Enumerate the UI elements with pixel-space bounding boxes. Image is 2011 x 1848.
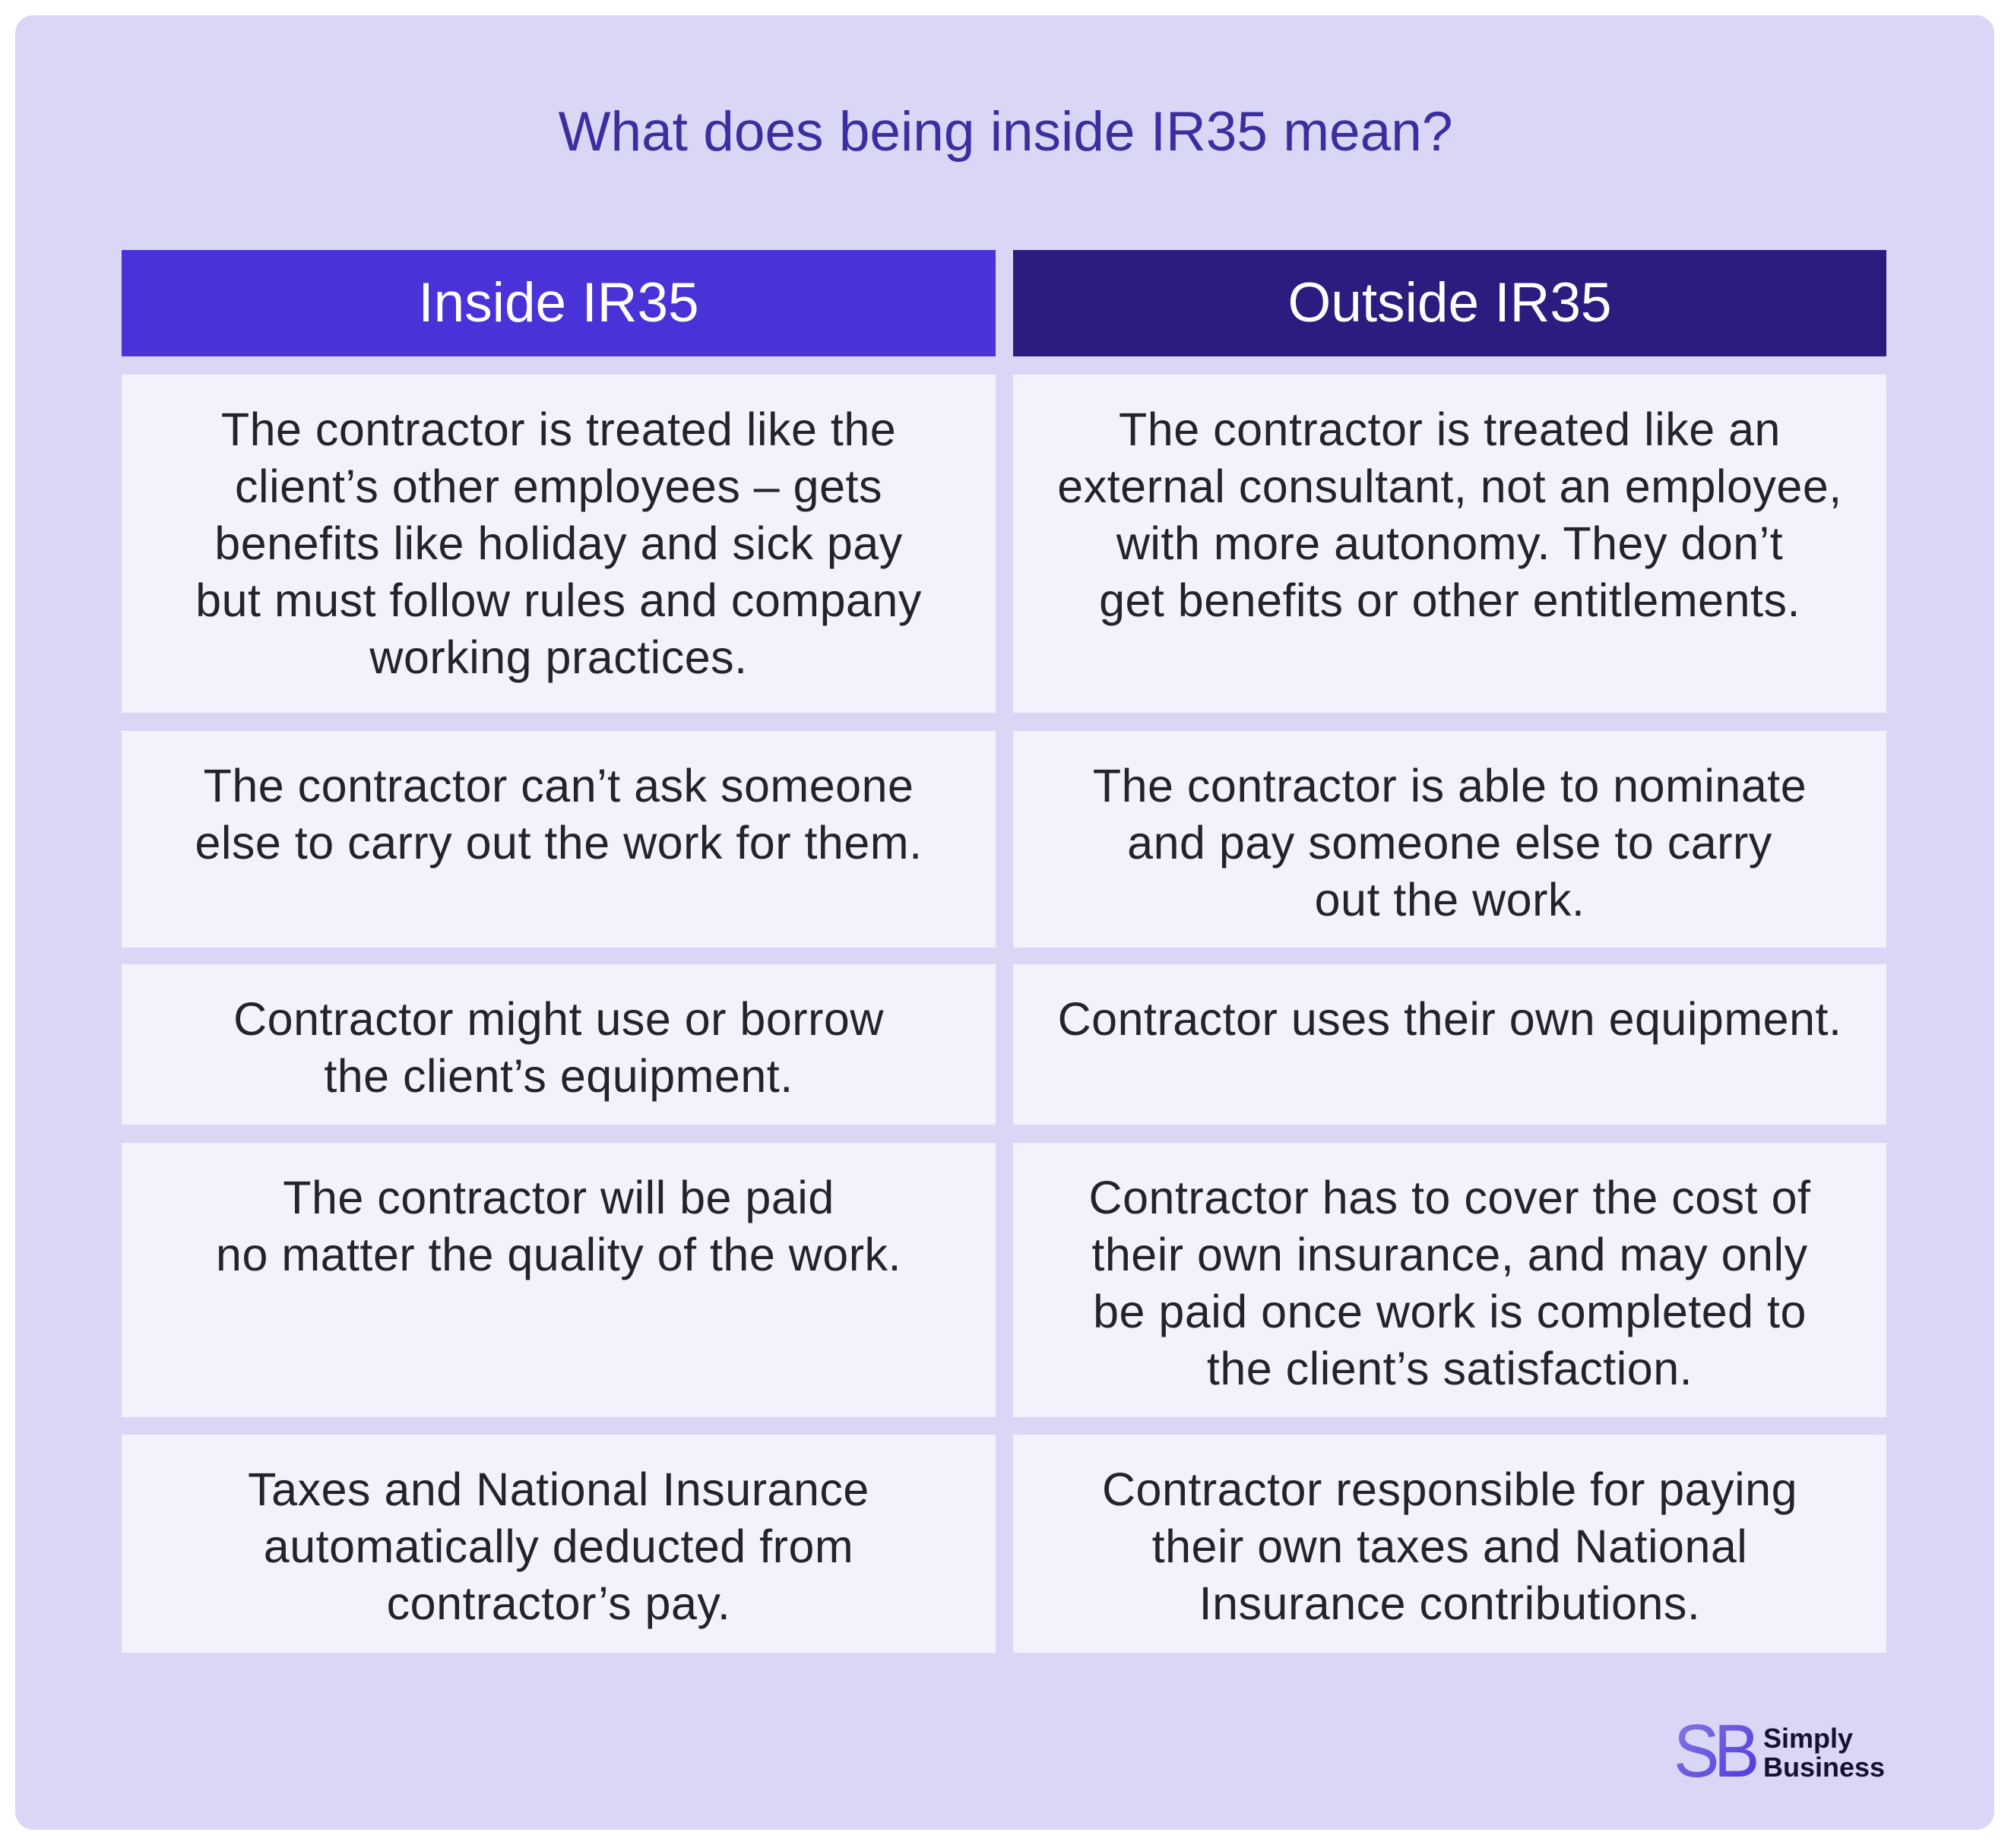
row 1 inside: The contractor is treated like the [221, 403, 896, 455]
header: outside IR35 [1013, 250, 1886, 356]
row 2 outside: and pay someone else to carry [1127, 817, 1772, 869]
row 3 inside: the client’s equipment. [324, 1050, 793, 1102]
row 5 outside: Insurance contributions. [1199, 1577, 1700, 1629]
row 5 inside [122, 1435, 996, 1653]
row 5 outside: their own taxes and National [1152, 1520, 1747, 1572]
row 2 outside: out the work. [1315, 874, 1585, 926]
row 4 outside: Contractor has to cover the cost of [1089, 1172, 1810, 1223]
row 2 inside [122, 731, 996, 948]
logo: Simply Business: Business [1763, 1751, 1885, 1783]
row 1 outside: The contractor is treated like an [1119, 403, 1781, 455]
row 2 outside: The contractor is able to nominate [1093, 760, 1807, 812]
row 1 inside: client’s other employees – gets [235, 460, 882, 512]
row 1 outside: external consultant, not an employee, [1057, 460, 1842, 512]
row 3 inside: Contractor might use or borrow [233, 993, 884, 1045]
row 5 inside: automatically deducted from [264, 1520, 853, 1572]
row 1 outside: with more autonomy. They don’t [1116, 517, 1783, 569]
row 4 outside: their own insurance, and may only [1091, 1229, 1808, 1280]
row 4 outside [1013, 1143, 1886, 1417]
row 1 inside: but must follow rules and company [195, 574, 922, 626]
row 5 outside [1013, 1435, 1886, 1653]
row 4 outside: be paid once work is completed to [1093, 1286, 1807, 1337]
row 4 outside: the client’s satisfaction. [1207, 1343, 1693, 1394]
row 4 inside [122, 1143, 996, 1417]
row 2 inside: else to carry out the work for them. [195, 817, 923, 869]
title: What does being inside IR35 mean? [559, 101, 1452, 163]
logo: Simply Business [1674, 1716, 1885, 1783]
row 1 inside: working practices. [369, 631, 748, 683]
row 2 inside: The contractor can’t ask someone [204, 760, 914, 812]
row 4 inside: The contractor will be paid [283, 1172, 834, 1223]
row 4 inside: no matter the quality of the work. [216, 1229, 901, 1280]
row 2 outside [1013, 731, 1886, 948]
row 5 inside: contractor’s pay. [387, 1577, 730, 1629]
row 3 outside [1013, 964, 1886, 1125]
row 3 inside [122, 964, 996, 1125]
row 5 outside: Contractor responsible for paying [1102, 1464, 1797, 1515]
row 1 inside [122, 375, 996, 713]
row 1 inside: benefits like holiday and sick pay [214, 517, 903, 569]
row 1 outside [1013, 375, 1886, 713]
row 3 outside: Contractor uses their own equipment. [1058, 993, 1842, 1045]
logo: Simply Business: Simply [1763, 1723, 1853, 1754]
row 1 outside: get benefits or other entitlements. [1099, 574, 1800, 626]
row 5 inside: Taxes and National Insurance [248, 1464, 869, 1515]
header: inside IR35: Inside IR35 [418, 272, 699, 334]
header: inside IR35 [122, 250, 996, 356]
header: outside IR35: Outside IR35 [1287, 272, 1612, 334]
